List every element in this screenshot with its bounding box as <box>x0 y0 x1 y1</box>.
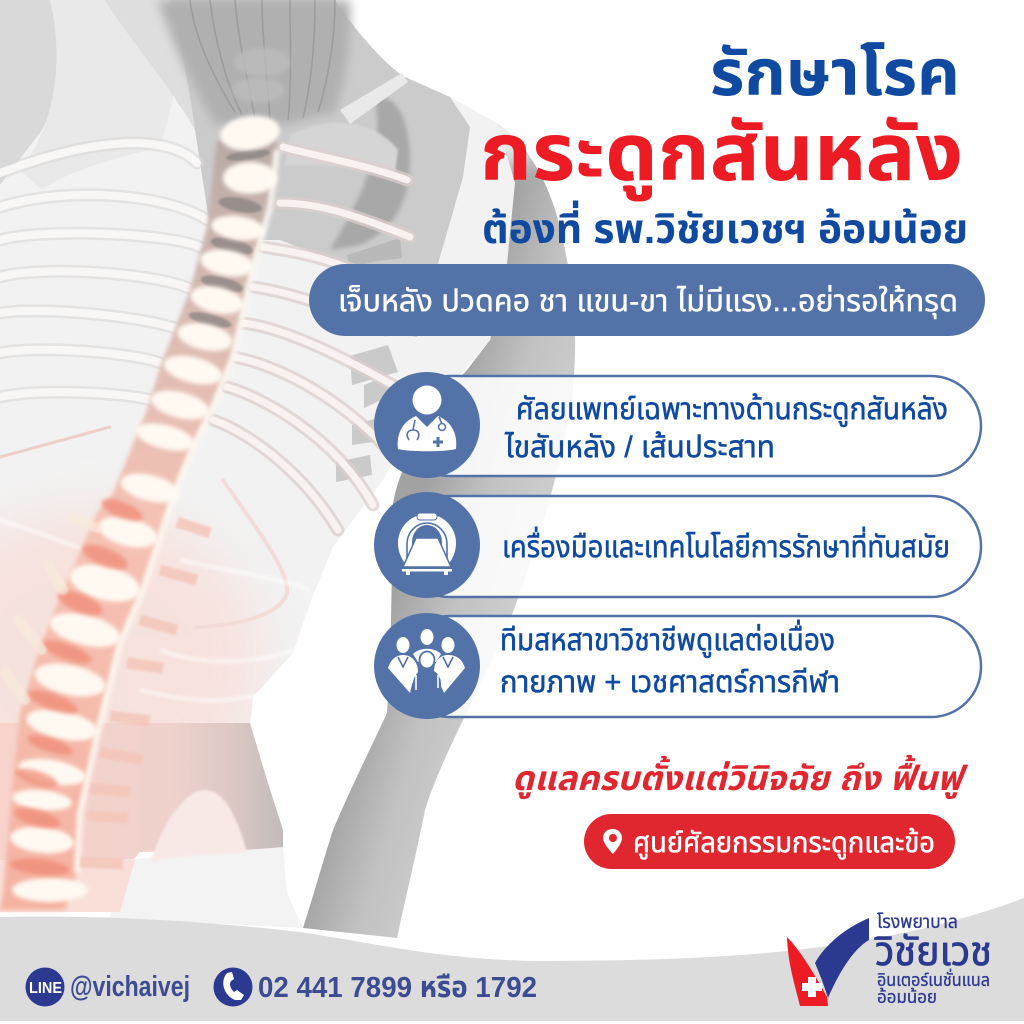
dark disc gaps <box>187 147 270 331</box>
card text: ทีมสหสาขาวิชาชีพดูแลต่อเนื่อง <box>500 619 835 658</box>
ribs right <box>197 147 410 627</box>
transverse processes right <box>80 522 210 864</box>
shoulder blade shadow steps right <box>336 238 402 482</box>
lower shirt pink tint <box>0 504 266 723</box>
department badge <box>584 814 955 869</box>
title <box>480 37 968 252</box>
lower spine red discs <box>9 494 145 878</box>
card: multidisciplinary team: กายภาพ + เวชศาสตร์การกีฬา <box>500 666 840 699</box>
lower left pink <box>0 860 135 912</box>
icon: CT scanner <box>374 492 480 598</box>
hospital logo: อินเตอร์เนชั่นแนล <box>877 968 990 990</box>
waist skin <box>0 723 283 875</box>
arm <box>303 123 575 938</box>
faint shirt wrinkles <box>0 520 310 700</box>
card text: เครื่องมือและเทคโนโลยีการรักษาที่ทันสมัย <box>502 526 950 564</box>
logo cross <box>802 977 822 997</box>
pants <box>110 847 303 928</box>
card: multidisciplinary team <box>374 613 981 719</box>
dark shoulder shadow <box>330 98 410 250</box>
right shoulder light rib shapes <box>285 123 398 175</box>
hair strands <box>190 0 335 120</box>
neck vertebrae shapes <box>232 48 290 102</box>
card: specialist doctors <box>374 372 981 478</box>
hospital logo: วิชัยเวช <box>874 930 992 974</box>
bright spine edge <box>77 150 277 873</box>
left strap <box>20 0 177 190</box>
contact: LINE: @vichaivej <box>70 971 190 1003</box>
torso shirt <box>0 0 515 725</box>
icon: handset <box>223 972 244 1000</box>
footer wave <box>0 898 1024 1021</box>
department badge: ศูนย์ศัลยกรรมกระดูกและข้อ <box>633 827 935 860</box>
hospital logo <box>787 912 992 1007</box>
icon: team <box>374 613 480 719</box>
skin top left <box>0 0 57 185</box>
title line 2: กระดูกสันหลัง <box>480 108 963 201</box>
contact: LINE: LINE <box>29 980 62 997</box>
logo check: red <box>787 937 828 1006</box>
title line 3: ต้องที่ รพ.วิชัยเวชฯ อ้อมน้อย <box>482 200 968 252</box>
hospital logo: อ้อมน้อย <box>877 987 937 1007</box>
icon: location pin <box>603 829 622 854</box>
spine column <box>0 140 277 910</box>
illustration: back with glowing spine <box>0 0 575 938</box>
card: modern equipment <box>374 492 981 598</box>
contact: phone: 02 441 7899 หรือ 1792 <box>258 972 537 1004</box>
red tagline: ดูแลครบตั้งแต่วินิจฉัย ถึง ฟื้นฟู <box>512 754 969 800</box>
logo text: โรงพยาบาล <box>877 912 958 933</box>
hair <box>158 0 350 125</box>
card text: ศัลยแพทย์เฉพาะทางด้านกระดูกสันหลัง <box>516 393 948 427</box>
contact: phone <box>214 968 537 1006</box>
neck light side <box>105 0 195 130</box>
card: specialist doctors: ไขสันหลัง / เส้นประสาท <box>504 431 775 464</box>
banner: symptoms: เจ็บหลัง ปวดคอ ชา แขน-ขา ไม่มีแรง...อย่ารอให้ทรุด <box>338 285 958 319</box>
arm upper fade <box>445 85 555 165</box>
banner: symptoms <box>309 264 985 336</box>
neck and upper back skin <box>105 0 470 337</box>
ribs left <box>0 143 207 457</box>
vertebrae <box>9 112 282 902</box>
contact: LINE <box>26 968 190 1006</box>
hip bone <box>150 790 247 862</box>
logo check: blue <box>815 918 869 998</box>
transverse processes left <box>5 517 97 700</box>
title line 1: รักษาโรค <box>710 37 960 109</box>
collar strap right <box>340 73 408 124</box>
icon: doctor <box>374 372 480 478</box>
